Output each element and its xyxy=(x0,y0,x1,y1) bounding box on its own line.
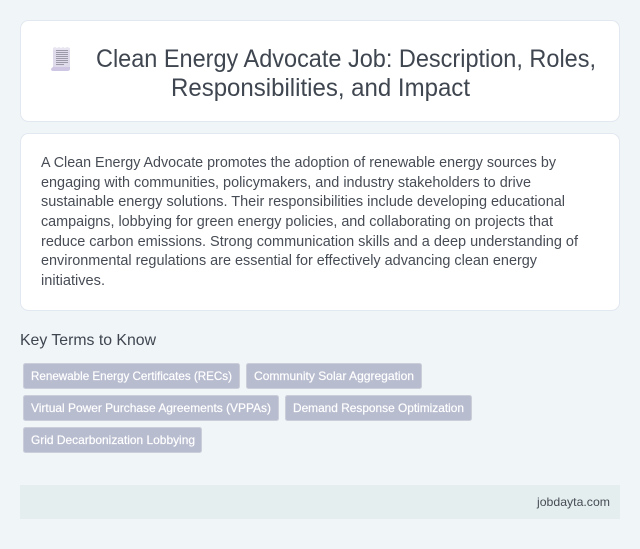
tag: renewable energy certificates xyxy=(24,364,240,388)
footer bar xyxy=(20,485,620,519)
tag: grid decarbonization lobbying: Grid Decarbonization Lobbying xyxy=(31,433,195,447)
tag: demand response optimization xyxy=(286,396,472,420)
panel: description card xyxy=(20,134,620,310)
text block: job description: sustainable energy solutions. Their responsibilities include developing educational xyxy=(41,194,565,210)
panel: title card xyxy=(20,20,620,122)
icon: document scroll xyxy=(51,47,70,71)
tag: demand response optimization: Demand Response Optimization xyxy=(293,401,464,415)
tag: community solar aggregation: Community Solar Aggregation xyxy=(254,369,414,383)
heading: page title xyxy=(96,45,596,102)
tag: virtual power purchase agreements xyxy=(24,396,278,420)
heading: key terms: Key Terms to Know xyxy=(20,332,156,349)
text block: job description: engaging with communities, policymakers, and industry stakeholders to drive xyxy=(41,175,531,191)
text block: job description: A Clean Energy Advocate promotes the adoption of renewable energy sources by xyxy=(41,155,557,171)
tag: renewable energy certificates: Renewable Energy Certificates (RECs) xyxy=(31,369,232,383)
tag: grid decarbonization lobbying xyxy=(24,428,202,452)
heading: page title: Clean Energy Advocate Job: Description, Roles, xyxy=(96,45,596,73)
text block: job description: reduce carbon emissions. Strong communication skills and a deep understanding of xyxy=(41,234,579,250)
heading: page title: Responsibilities, and Impact xyxy=(171,74,470,102)
footer source text: jobdayta.com xyxy=(536,495,610,509)
text block: job description: environmental regulations are essential for effectively advancing clean energy xyxy=(41,253,538,269)
text block: job description: campaigns, lobbying for green energy policies, and collaborating on projects that xyxy=(41,214,553,230)
tag: virtual power purchase agreements: Virtual Power Purchase Agreements (VPPAs) xyxy=(31,401,271,415)
tag: community solar aggregation xyxy=(246,364,422,388)
tag list: key terms xyxy=(24,364,472,452)
text block: job description: initiatives. xyxy=(41,273,105,289)
text block: job description xyxy=(41,155,579,289)
